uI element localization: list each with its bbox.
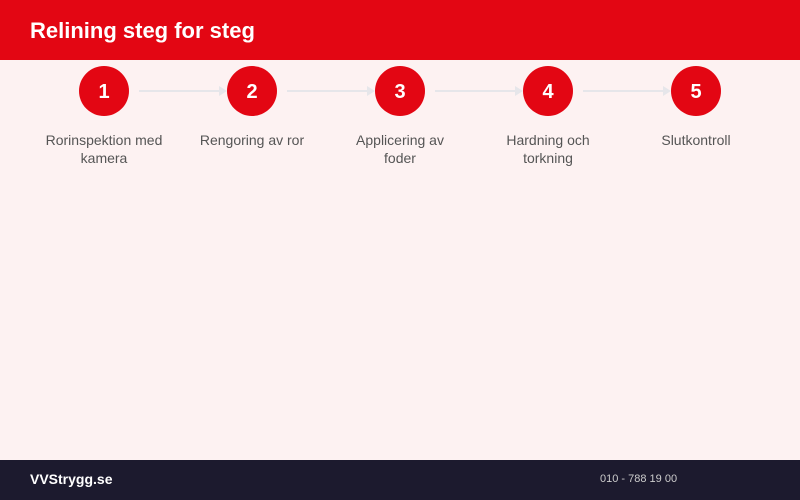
step 4 — [523, 66, 573, 116]
label 4 — [506, 132, 590, 166]
label 4: Hardning och — [506, 132, 590, 148]
label 4: torkning — [523, 150, 573, 166]
step 3 — [375, 66, 425, 116]
arrows — [139, 86, 670, 96]
label 2: Rengoring av ror — [200, 132, 304, 148]
label 5: Slutkontroll — [661, 132, 731, 148]
step 5: 5 — [690, 81, 702, 103]
footer — [0, 460, 800, 500]
step 3: 3 — [394, 81, 406, 103]
label 1: Rorinspektion med kamera — [46, 132, 162, 166]
step 2: 2 — [246, 81, 258, 103]
title: Relining steg for steg — [30, 18, 255, 43]
label 3: Applicering av — [356, 132, 444, 148]
label 3: foder — [384, 150, 416, 166]
step 1: 1 — [98, 81, 110, 103]
step 2 — [227, 66, 277, 116]
header — [0, 0, 800, 60]
step 4: 4 — [542, 81, 554, 103]
step 5 — [671, 66, 721, 116]
step 1 — [79, 66, 129, 116]
phone: 010 - 788 19 00 — [600, 473, 677, 485]
brand: VVStrygg.se — [30, 471, 112, 487]
label 3 — [356, 132, 444, 166]
